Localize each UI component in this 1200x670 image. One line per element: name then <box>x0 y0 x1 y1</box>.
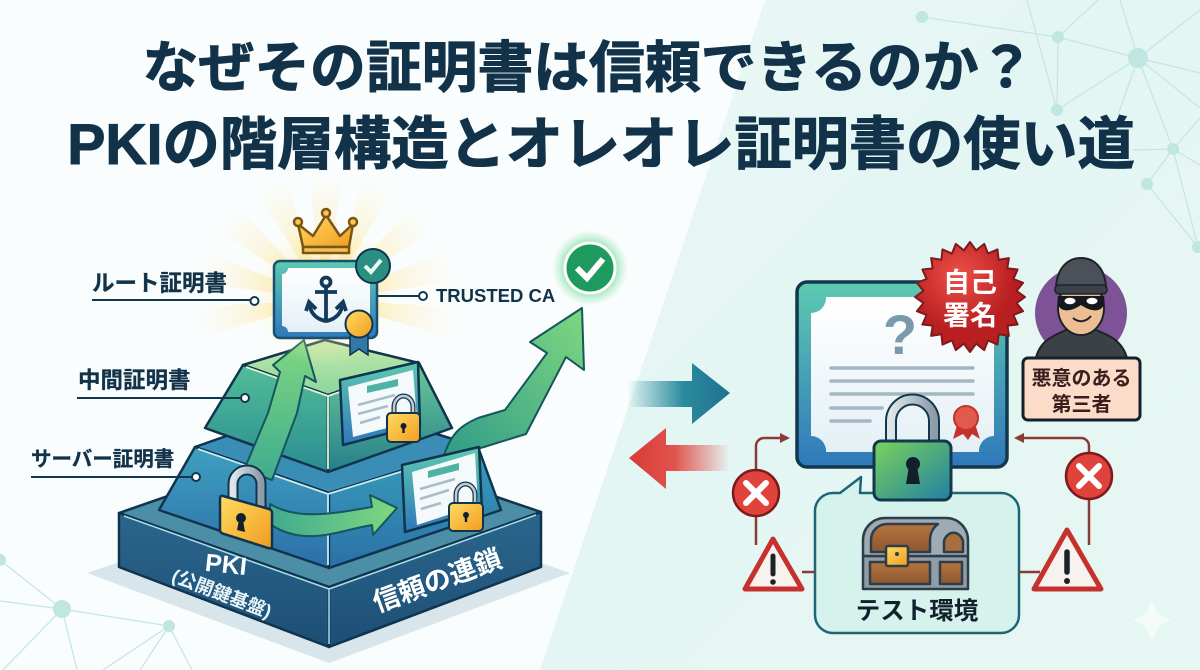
server certificate <box>402 447 483 532</box>
top layer <box>205 340 452 472</box>
text lines <box>831 368 973 421</box>
label: intermediate certificate <box>77 368 249 402</box>
panel: test environment <box>815 477 1019 633</box>
label: intermediate certificate: 中間証明書 <box>78 368 191 393</box>
seal: self-signed: 自己 <box>943 268 997 298</box>
title: なぜその証明書は信頼できるのか？ <box>143 36 1034 99</box>
icon: left X <box>733 470 779 516</box>
icon: anchor <box>306 278 346 321</box>
base layer <box>119 440 541 647</box>
text: 信頼の連鎖: 信頼の連鎖 <box>369 544 506 618</box>
seal: self-signed <box>915 242 1025 352</box>
icon: thief <box>1035 258 1127 359</box>
label: server certificate: サーバー証明書 <box>31 448 174 471</box>
label: malicious third party <box>1023 358 1140 420</box>
icon: right warning <box>1034 530 1101 589</box>
title: PKIの階層構造とオレオレ証明書の使い道 <box>67 113 1135 177</box>
intermediate certificate <box>340 362 420 445</box>
label: malicious third party: 第三者 <box>1052 393 1112 416</box>
green arrow: horizontal <box>270 495 397 536</box>
seal: self-signed: 署名 <box>943 301 997 331</box>
light rays <box>195 176 455 338</box>
icon: left warning <box>745 539 802 589</box>
label: trusted CA <box>378 285 555 306</box>
big gold lock <box>220 470 272 548</box>
label: root certificate <box>92 271 258 305</box>
arrow: red left <box>629 428 730 489</box>
label: server certificate <box>31 448 200 481</box>
green arrow: vertical <box>244 340 316 480</box>
icon: chest <box>863 518 968 589</box>
middle layer <box>159 400 501 568</box>
self-signed certificate <box>797 282 1007 467</box>
arrow: blue right <box>627 363 730 424</box>
glow behind root <box>250 217 400 367</box>
icon: crown <box>294 209 357 253</box>
connector: right warning <box>1014 433 1089 572</box>
root certificate <box>274 249 390 355</box>
icon: green lock <box>874 400 951 500</box>
label: root certificate: ルート証明書 <box>92 271 227 296</box>
text: test environment: テスト環境 <box>856 597 979 625</box>
panel: PKI pyramid <box>87 308 584 663</box>
text: PKI: PKI <box>204 549 248 581</box>
title <box>67 36 1135 177</box>
connector: left warning <box>756 433 815 572</box>
icon: right X <box>1066 453 1112 499</box>
icon: green check <box>552 230 628 306</box>
rosette <box>346 310 372 355</box>
red rosette <box>953 406 980 440</box>
pyramid shadow <box>87 490 570 663</box>
label: malicious third party: 悪意のある <box>1032 367 1132 390</box>
green arrow: to trusted <box>444 308 584 460</box>
label: trusted CA: TRUSTED CA <box>436 285 555 306</box>
check badge <box>356 249 390 283</box>
text: 公開鍵基盤: (公開鍵基盤) <box>169 565 275 622</box>
question mark: ? <box>883 303 917 366</box>
